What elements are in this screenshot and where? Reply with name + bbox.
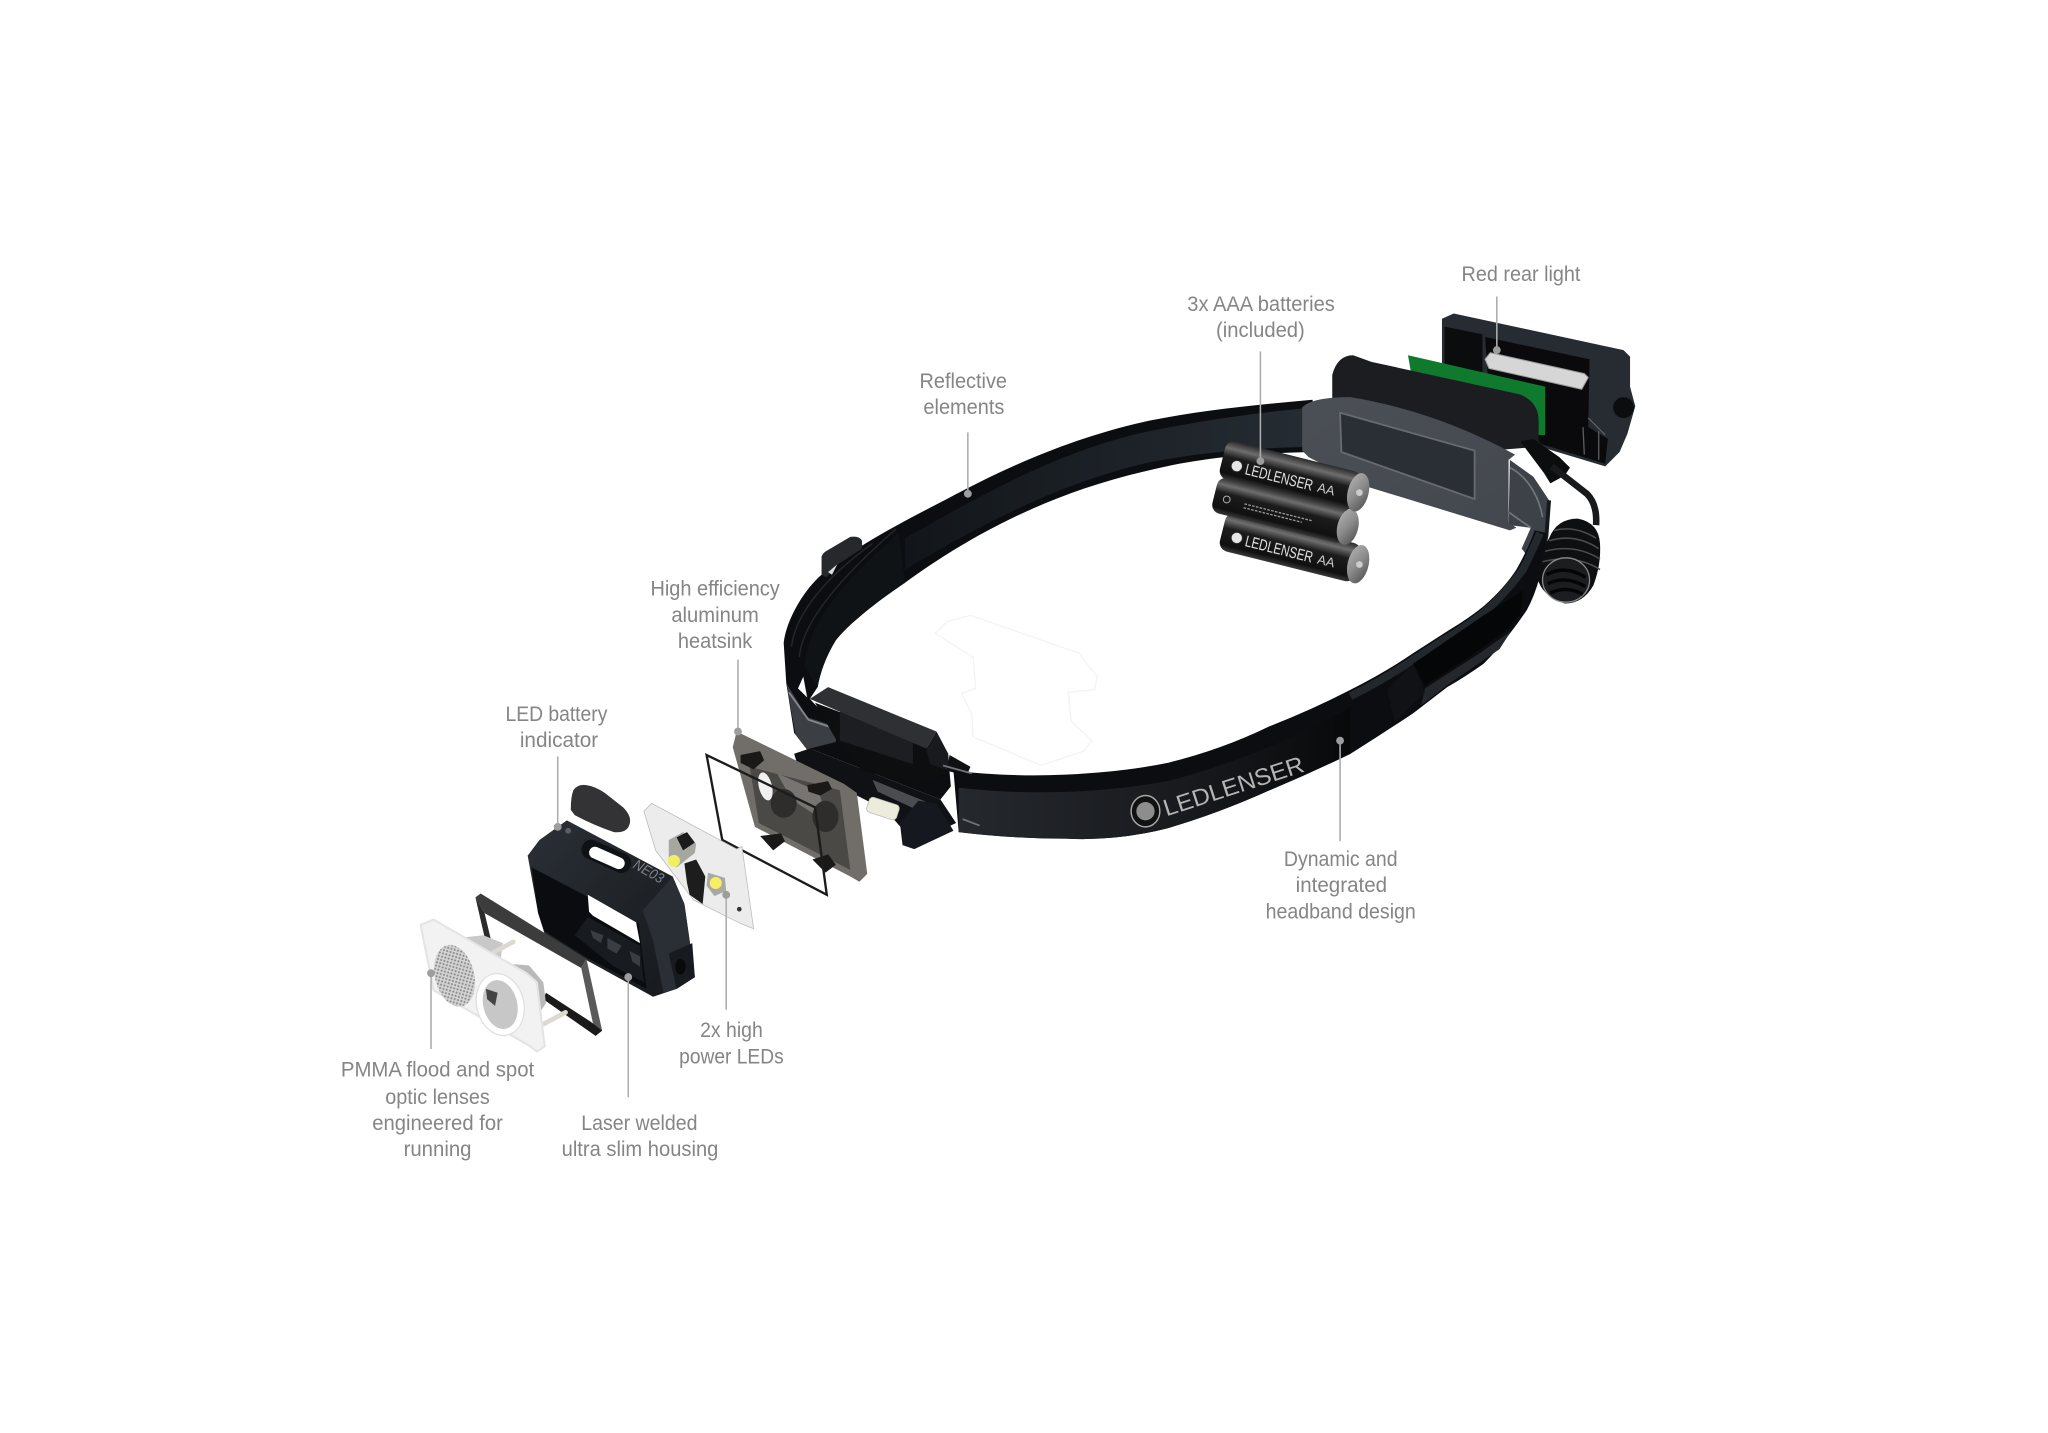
label: heatsink: aluminum — [671, 604, 759, 627]
circuit board — [644, 803, 754, 929]
heatsink round recess 2 — [812, 801, 839, 832]
housing shell — [528, 820, 695, 997]
housing slot rim — [578, 837, 634, 876]
clip underside mass — [810, 711, 951, 799]
gasket left bar — [475, 897, 492, 948]
strain relief — [1520, 439, 1570, 483]
gasket top bar — [475, 894, 586, 968]
label: housing — [562, 1112, 718, 1161]
label: optic lenses: optic lenses — [385, 1086, 490, 1109]
battery one: AA — [1316, 480, 1337, 499]
housing corner facet — [643, 877, 695, 993]
label: headband design — [1266, 848, 1416, 923]
indicator LED — [565, 828, 571, 834]
label: optic lenses: PMMA flood and spot — [341, 1058, 534, 1081]
right band near plate — [1509, 460, 1549, 575]
band ribbed strip — [1421, 631, 1511, 705]
screw hole — [675, 959, 686, 974]
label: headband design: integrated — [1296, 874, 1387, 897]
label: heatsink: heatsink — [678, 630, 753, 653]
heatsink tabs — [741, 751, 836, 873]
heatsink round recess — [771, 789, 797, 818]
battery one — [1218, 439, 1373, 514]
housing window — [588, 895, 640, 943]
battery two — [1210, 476, 1362, 547]
rubber cap — [571, 785, 630, 832]
label: housing: Laser welded — [581, 1112, 697, 1135]
band fastener block — [1387, 664, 1425, 722]
LED board — [644, 803, 754, 929]
thin seal — [707, 755, 827, 895]
board metal block — [669, 832, 696, 867]
label: LED battery indicator: indicator — [520, 729, 598, 752]
strap rim lines — [792, 529, 896, 657]
heatsink centre — [777, 773, 828, 823]
housing end block — [669, 943, 695, 989]
left strap sleeve — [805, 533, 905, 687]
lens — [421, 920, 566, 1052]
battery cover — [1332, 355, 1539, 451]
label: heatsink: High efficiency — [650, 578, 780, 601]
label: reflective elements — [920, 370, 1007, 419]
label: optic lenses — [341, 1058, 534, 1161]
connector assembly — [794, 749, 956, 843]
leader lines — [427, 297, 1501, 1097]
band shape — [953, 530, 1546, 839]
connector light strip — [872, 780, 930, 810]
battery one: LEDLENSER — [1243, 461, 1315, 495]
heatsink — [733, 732, 867, 882]
front clip — [794, 687, 970, 843]
clip end — [926, 732, 950, 771]
spot optic — [470, 968, 531, 1041]
lens plate — [421, 920, 545, 1052]
rear unit — [1302, 314, 1635, 604]
ghost outline — [935, 615, 1097, 765]
label: optic lenses: running — [404, 1138, 472, 1161]
label: high power LEDs: 2x high — [700, 1019, 763, 1042]
LED one — [668, 855, 680, 867]
label: batteries: 3x AAA batteries — [1187, 293, 1335, 316]
label: LED battery indicator — [505, 703, 608, 752]
label: batteries — [1187, 293, 1335, 342]
housing — [528, 820, 695, 997]
coil highlights — [1543, 529, 1600, 570]
rear light lens — [1485, 353, 1588, 389]
inner wall details — [575, 917, 644, 982]
housing interior — [532, 867, 647, 989]
coil inner rings — [1546, 570, 1586, 594]
gasket bottom bar — [543, 993, 602, 1036]
gasket opening — [485, 913, 590, 1022]
front band — [943, 530, 1546, 839]
label: headband design: Dynamic and — [1284, 848, 1398, 871]
rear compartment main — [1485, 337, 1608, 464]
gap in strap — [798, 677, 807, 698]
label: reflective elements: elements — [923, 396, 1004, 419]
black tab — [900, 801, 953, 849]
white connector — [866, 796, 900, 821]
back and left strap — [784, 400, 1313, 750]
rear housing ribs — [1583, 418, 1605, 460]
label: optic lenses: engineered for — [372, 1112, 503, 1135]
label: red rear light: Red rear light — [1462, 263, 1581, 286]
inner wall tabs — [590, 930, 640, 967]
label: housing: ultra slim housing — [562, 1138, 718, 1161]
battery three — [1218, 511, 1373, 586]
connector parts — [866, 796, 953, 849]
coiled cable — [1537, 519, 1600, 604]
end tab — [947, 755, 970, 776]
flood optic — [428, 941, 481, 1011]
battery three: LEDLENSER — [1243, 533, 1315, 566]
battery three: AA — [1316, 552, 1337, 570]
rear compartment left — [1445, 327, 1482, 392]
label: high power LEDs: power LEDs — [679, 1045, 784, 1068]
printed logo — [1131, 751, 1307, 827]
band end stripes — [943, 765, 980, 826]
lens back two — [511, 964, 546, 1019]
model mark: NE03 — [630, 857, 666, 887]
clip top lip — [810, 687, 936, 749]
LED two — [707, 873, 726, 896]
label: LED battery indicator: LED battery — [505, 703, 608, 726]
heatsink interior — [750, 767, 850, 870]
band side rim — [1351, 533, 1540, 696]
grey plate — [1302, 397, 1516, 530]
strap grey section — [786, 683, 837, 750]
lens back one — [460, 935, 503, 963]
label: high power LEDs — [679, 1019, 784, 1068]
board component — [684, 860, 705, 904]
front gasket — [475, 894, 602, 1036]
band lower lighter area — [959, 707, 1351, 839]
coil opening — [1543, 558, 1590, 602]
plate window — [1340, 413, 1475, 499]
gasket right bar — [581, 959, 602, 1036]
board screw hole — [737, 907, 742, 912]
cable — [1552, 466, 1596, 525]
heatsink hole — [756, 771, 775, 802]
band outer rim — [1539, 500, 1549, 575]
rear housing side knob — [1613, 397, 1634, 418]
band dark panel — [1413, 590, 1523, 686]
housing slot — [587, 845, 627, 871]
label: heatsink — [650, 578, 780, 653]
clip body — [815, 703, 948, 784]
batteries — [1210, 439, 1373, 586]
lens pins — [494, 942, 566, 1024]
logo wordmark: LEDLENSER — [1160, 751, 1307, 821]
small strap clip — [822, 537, 862, 577]
coil body — [1537, 519, 1600, 604]
strap centre panel — [905, 408, 1313, 570]
label: reflective elements: Reflective — [920, 370, 1007, 393]
board switch — [677, 832, 695, 850]
clip recess — [840, 711, 913, 764]
band behind plate — [1509, 460, 1549, 562]
heatsink plate — [733, 732, 867, 882]
outer strap — [784, 400, 1313, 750]
green circuit board — [1408, 355, 1545, 435]
label: batteries: (included) — [1216, 319, 1305, 342]
logo disc — [1131, 796, 1160, 827]
rear light housing — [1442, 314, 1635, 466]
band stripes — [1509, 468, 1543, 528]
label: headband design: headband design — [1266, 900, 1416, 923]
grey section stripe — [789, 692, 836, 729]
